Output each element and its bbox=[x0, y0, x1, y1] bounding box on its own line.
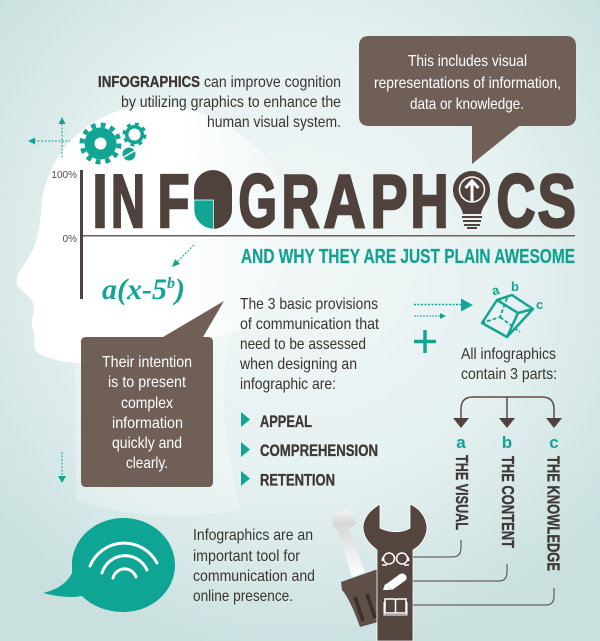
callout: intention: Their intention bbox=[102, 354, 192, 371]
callout: visual representations: data or knowledge. bbox=[410, 96, 524, 113]
icon: pencil bbox=[383, 573, 407, 590]
icon: cube: b bbox=[511, 279, 519, 294]
title: S bbox=[538, 159, 576, 243]
callout: intention: information bbox=[112, 415, 183, 432]
closing text: online presence. bbox=[193, 588, 293, 605]
parts text: All infographics bbox=[461, 346, 556, 363]
icon: O pie chart bbox=[194, 170, 232, 229]
title: I bbox=[92, 159, 108, 243]
column a: the visual: a bbox=[456, 433, 466, 452]
icon: light bulb bbox=[453, 171, 490, 228]
formula: ) bbox=[172, 273, 185, 306]
callout: intention: quickly and bbox=[112, 435, 182, 452]
icon: cube: a bbox=[490, 282, 502, 298]
callout: intention bbox=[81, 301, 224, 487]
title: A bbox=[324, 159, 366, 243]
callout: visual representations: This includes visual bbox=[408, 53, 527, 70]
provisions text: when designing an bbox=[239, 356, 357, 373]
connector lines bbox=[413, 540, 554, 605]
column c: the knowledge: c bbox=[549, 433, 559, 452]
title: F bbox=[158, 159, 190, 243]
intro text: human visual system. bbox=[207, 114, 341, 131]
title: H bbox=[410, 159, 448, 243]
chart axis: 100% bbox=[51, 170, 77, 181]
icon: dotted axis arrows bbox=[28, 117, 70, 159]
icon: cube bbox=[482, 279, 543, 337]
list: appeal, comprehension, retention: APPEAL bbox=[260, 412, 312, 431]
formula: b bbox=[167, 275, 175, 292]
column a: the visual: THE VISUAL bbox=[452, 455, 472, 530]
column c: the knowledge bbox=[544, 433, 564, 571]
column b: the content: THE CONTENT bbox=[498, 456, 518, 548]
chart axis bbox=[51, 170, 575, 299]
title: R bbox=[282, 159, 320, 243]
provisions text: need to be assessed bbox=[240, 336, 366, 353]
chart axis: 0% bbox=[63, 234, 77, 245]
icon: wrench and tools bbox=[332, 504, 427, 641]
icon: gears bbox=[82, 124, 145, 162]
list: appeal, comprehension, retention bbox=[241, 412, 378, 490]
provisions text bbox=[239, 296, 379, 393]
title: N bbox=[111, 159, 145, 243]
list: appeal, comprehension, retention: RETENTION bbox=[260, 470, 335, 490]
column c: the knowledge: THE KNOWLEDGE bbox=[544, 456, 564, 571]
intro text: can improve cognition bbox=[204, 74, 341, 91]
list: appeal, comprehension, retention: COMPREHENSION bbox=[260, 441, 378, 460]
icon: dashed arrow bbox=[172, 245, 194, 267]
title bbox=[92, 159, 576, 243]
callout: visual representations bbox=[359, 36, 576, 164]
branching arrows bbox=[453, 397, 562, 428]
column b: the content: b bbox=[502, 433, 512, 452]
closing text: Infographics are an bbox=[193, 527, 313, 544]
icon: open book bbox=[384, 599, 407, 615]
callout: visual representations: representations of information, bbox=[374, 75, 561, 92]
closing text bbox=[193, 527, 315, 605]
parts text: contain 3 parts: bbox=[461, 366, 557, 383]
icon: down arrow bbox=[58, 452, 66, 483]
title: C bbox=[496, 159, 536, 243]
closing text: communication and bbox=[193, 568, 315, 585]
provisions text: The 3 basic provisions bbox=[240, 296, 378, 313]
formula: a(x-5 bbox=[102, 273, 167, 306]
parts text bbox=[461, 346, 557, 383]
column a: the visual bbox=[452, 433, 472, 530]
provisions text: infographic are: bbox=[240, 376, 336, 393]
callout: intention: is to present bbox=[108, 374, 186, 391]
speech bubble icon bbox=[43, 518, 175, 612]
closing text: important tool for bbox=[193, 548, 301, 565]
head silhouette bbox=[17, 106, 290, 516]
icon: dashed arrows and plus bbox=[414, 298, 473, 353]
icon: glasses bbox=[382, 553, 409, 565]
intro text: INFOGRAPHICS bbox=[98, 74, 200, 91]
callout: intention: complex bbox=[121, 395, 173, 412]
title: G bbox=[238, 159, 277, 243]
title: P bbox=[370, 159, 408, 243]
intro text bbox=[98, 74, 341, 131]
icon: cube: c bbox=[536, 297, 543, 312]
column b: the content bbox=[498, 433, 518, 548]
callout: intention: clearly. bbox=[126, 455, 168, 472]
intro text: by utilizing graphics to enhance the bbox=[121, 94, 341, 111]
provisions text: of communication that bbox=[240, 316, 379, 333]
